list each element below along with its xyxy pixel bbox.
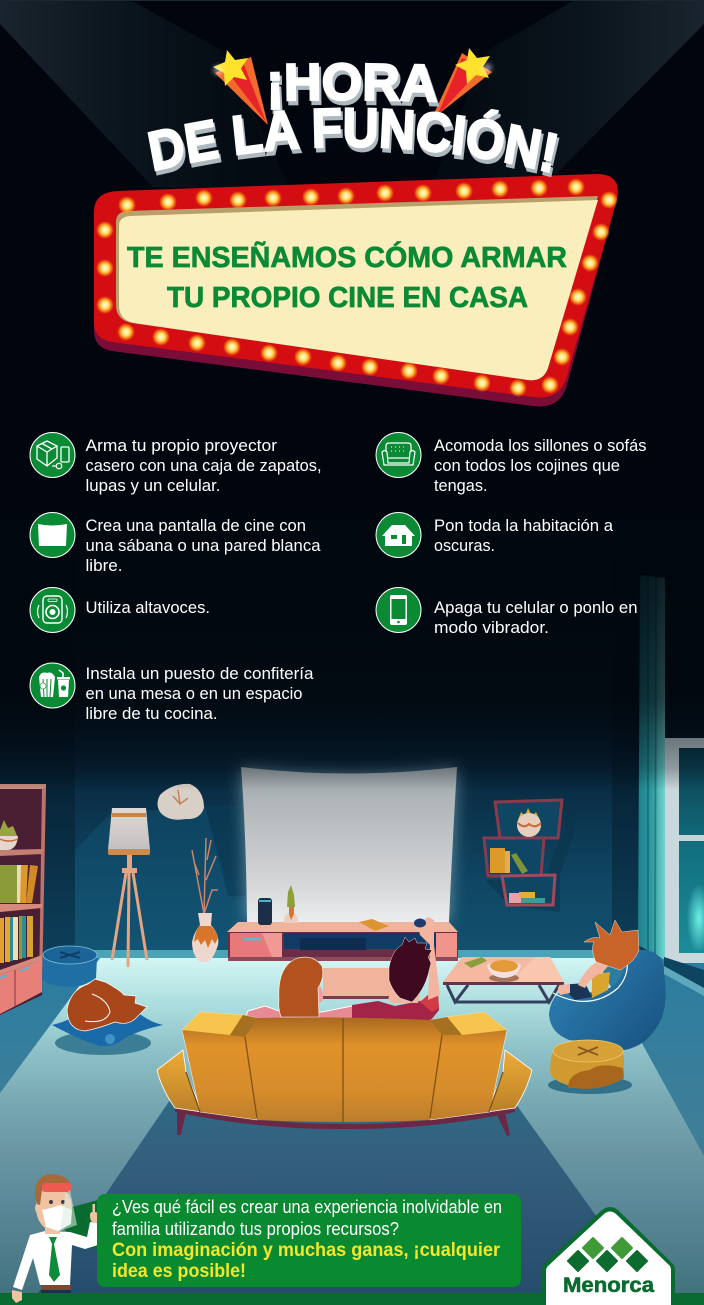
tip 5 text — [434, 437, 646, 495]
right rocket — [431, 48, 492, 120]
tip 5 text: con todos los cojines que — [434, 457, 620, 475]
icon: phone — [376, 588, 421, 632]
tip 1: projector — [30, 432, 322, 495]
title rockets — [213, 48, 492, 125]
tip 3: speakers — [30, 588, 210, 632]
TV stand — [227, 922, 458, 961]
callout highlight text: Con imaginación y muchas ganas, ¡cualquier — [112, 1240, 501, 1261]
icon: box and phone — [30, 432, 75, 478]
tip 2 text: Crea una pantalla de cine con — [86, 517, 306, 535]
tip 7 text — [434, 599, 638, 637]
curtain — [638, 575, 665, 960]
vase with branches — [192, 838, 218, 962]
icon: sofa — [376, 432, 421, 478]
callout question text — [112, 1197, 502, 1239]
icon: bedsheet screen — [30, 512, 75, 558]
blue pouf left — [42, 946, 97, 987]
tip 5 text: tengas. — [434, 477, 488, 495]
icon: speaker — [30, 588, 75, 632]
tip 4: candy stand — [30, 663, 314, 723]
low table behind sofa — [323, 968, 391, 999]
boy in bean-bag chair — [549, 920, 666, 1050]
icon: house — [376, 512, 421, 558]
callout highlight text — [112, 1240, 501, 1282]
tip 7 text: modo vibrador. — [434, 619, 549, 637]
man with remote — [352, 917, 440, 1022]
window — [664, 738, 704, 996]
title: DE LA FUNCIÓN! — [156, 111, 560, 178]
projection screen — [241, 767, 457, 922]
callout highlight text: idea es posible! — [112, 1261, 246, 1282]
presenter character — [12, 1174, 100, 1303]
gold pouf — [548, 1040, 632, 1094]
sofa — [157, 1012, 532, 1136]
logo wordmark: Menorca — [563, 1274, 654, 1297]
title — [148, 62, 560, 178]
Menorca logo — [542, 1207, 675, 1305]
marquee bulbs — [96, 178, 618, 397]
icon: popcorn and drink — [30, 663, 75, 708]
bookshelf — [0, 784, 46, 1015]
marquee subtitle: TE ENSEÑAMOS CÓMO ARMAR — [127, 240, 567, 274]
logo diamonds — [568, 1238, 647, 1271]
tip 7 text: Apaga tu celular o ponlo en — [434, 599, 638, 617]
floor lamp — [108, 808, 150, 967]
book on stand — [359, 919, 389, 931]
callout question text: ¿Ves qué fácil es crear una experiencia inolvidable en — [112, 1197, 502, 1217]
coffee table — [443, 957, 564, 1002]
tip 2 text: libre. — [86, 557, 122, 575]
tip 1 text — [86, 437, 322, 495]
tip 1 text: Arma tu propio proyector — [86, 437, 278, 455]
title: ¡HORA — [270, 62, 438, 110]
tip 4 text: en una mesa o en un espacio — [86, 685, 302, 703]
room scene — [0, 513, 704, 1305]
tip 5: sofas — [376, 432, 646, 495]
top fade overlay — [0, 513, 704, 790]
tip 6: darkness — [376, 512, 614, 558]
callout question text: familia utilizando tus propios recursos? — [112, 1219, 399, 1239]
tip 1 text: casero con una caja de zapatos, — [86, 457, 322, 475]
title: DE LA FUNCIÓN! — [148, 107, 558, 173]
tip 6 text: Pon toda la habitación a — [434, 517, 614, 535]
tip 4 text: Instala un puesto de confitería — [86, 665, 314, 683]
tip 1 text: lupas y un celular. — [86, 477, 220, 495]
tip 6 text — [434, 517, 614, 555]
tips list — [30, 432, 646, 723]
tip 4 text — [86, 665, 314, 723]
wall clock — [158, 784, 204, 820]
tip 2: screen — [30, 512, 321, 575]
left rocket — [213, 50, 268, 125]
floor — [0, 950, 704, 1305]
tip 5 text: Acomoda los sillones o sofás — [434, 437, 646, 455]
marquee subtitle — [127, 240, 567, 314]
ceiling light beams — [0, 0, 704, 190]
marquee subtitle: TU PROPIO CINE EN CASA — [167, 282, 528, 314]
wall shelf — [484, 800, 575, 912]
tip 2 text — [86, 517, 321, 575]
cat on pillow — [52, 979, 163, 1055]
callout — [97, 1194, 521, 1287]
smart speaker and plant — [258, 885, 298, 925]
tip 4 text: libre de tu cocina. — [86, 705, 218, 723]
footer band — [0, 1293, 704, 1305]
title: ¡HORA — [272, 66, 440, 114]
marquee sign — [94, 174, 618, 407]
wall — [0, 513, 704, 960]
woman on sofa — [245, 957, 392, 1022]
tip 6 text: oscuras. — [434, 537, 495, 555]
tip 2 text: una sábana o una pared blanca — [86, 537, 321, 555]
tip 3 text: Utiliza altavoces. — [86, 599, 210, 617]
tip 7: cell phone — [376, 588, 638, 637]
